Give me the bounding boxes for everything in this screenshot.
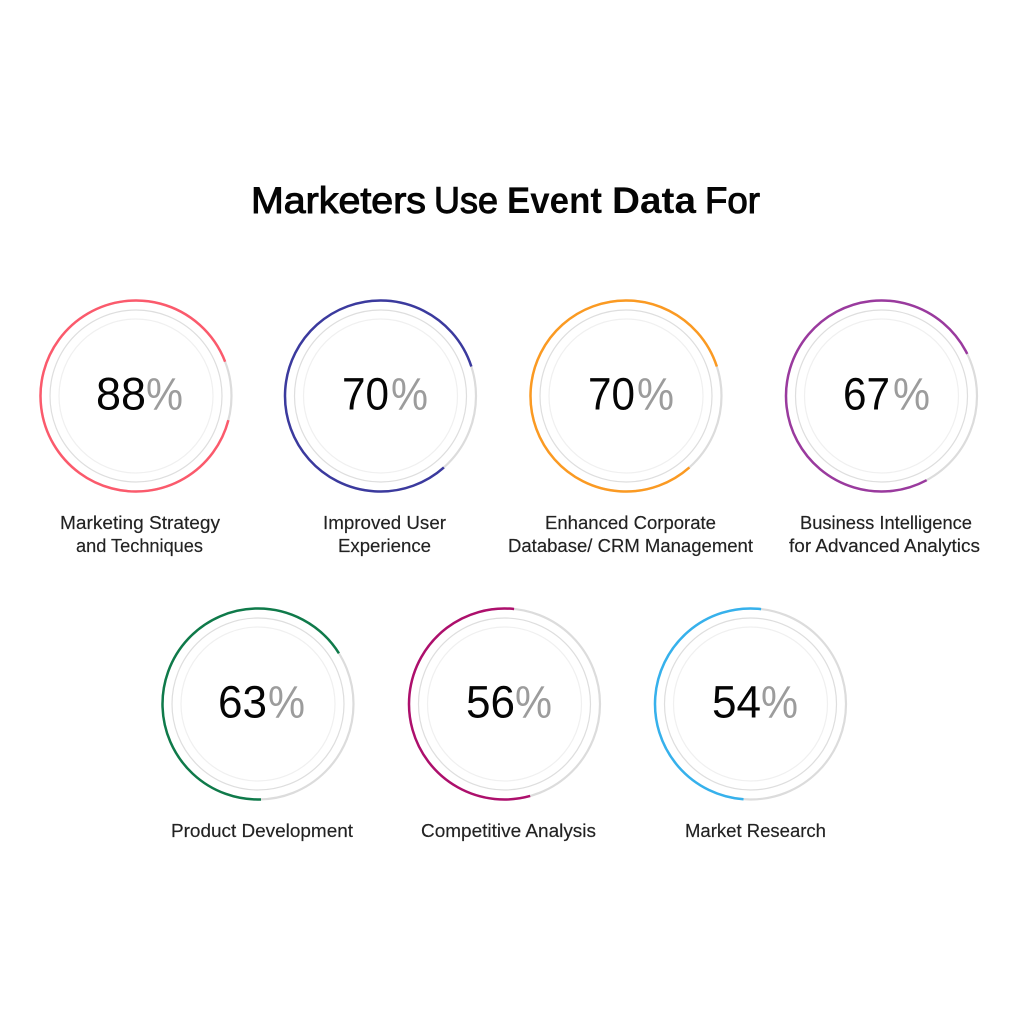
stat: Competitive Analysis 56%: 56 [466, 676, 515, 728]
stat: Business Intelligence 67%: % [893, 368, 930, 420]
stat: Competitive Analysis 56%: % [515, 676, 552, 728]
title [251, 180, 760, 221]
stat: Business Intelligence 67%: 67 [843, 368, 890, 420]
stat: Enhanced Corporate Database 70%: Database/ CRM Management [508, 536, 753, 556]
stat: Improved User Experience 70%: Experience [338, 536, 431, 556]
title: Use [434, 180, 498, 221]
stat: Business Intelligence 67% [752, 267, 1011, 556]
stat: Improved User Experience 70% [246, 261, 515, 556]
stat: Market Research 54%: Market Research [685, 821, 826, 841]
stat: Marketing Strategy 88%: and Techniques [76, 536, 203, 556]
stat: Enhanced Corporate Database 70%: 70 [588, 368, 635, 420]
stat: Competitive Analysis 56%: Competitive Analysis [421, 821, 596, 841]
stat: Market Research 54%: 54 [712, 676, 761, 728]
stat: Improved User Experience 70%: % [391, 368, 428, 420]
stat: Market Research 54% [648, 602, 853, 841]
stat: Product Development 63%: % [268, 676, 305, 728]
title: Event [507, 180, 602, 221]
stat: Product Development 63%: 63 [218, 676, 267, 728]
stat: Enhanced Corporate Database 70%: % [637, 368, 674, 420]
stat: Market Research 54%: % [761, 676, 798, 728]
stat: Marketing Strategy 88%: 88 [96, 368, 146, 420]
stat: Marketing Strategy 88% [19, 279, 253, 556]
title: For [705, 180, 760, 221]
stat: Product Development 63%: Product Development [171, 821, 353, 841]
stat: Marketing Strategy 88%: % [146, 368, 183, 420]
stat: Product Development 63% [160, 606, 356, 841]
stat: Business Intelligence 67%: for Advanced Analytics [789, 536, 980, 556]
stat: Enhanced Corporate Database 70%: Enhanced Corporate [545, 513, 716, 533]
title: Data [612, 180, 696, 221]
stat: Business Intelligence 67%: Business Intelligence [800, 513, 972, 533]
stat: Competitive Analysis 56% [387, 586, 622, 841]
stat: Enhanced Corporate Database 70% [491, 261, 761, 556]
title: Marketers [251, 180, 426, 221]
stat: Marketing Strategy 88%: Marketing Strategy [60, 513, 220, 533]
stat: Improved User Experience 70%: Improved User [323, 513, 446, 533]
stat: Improved User Experience 70%: 70 [342, 368, 389, 420]
